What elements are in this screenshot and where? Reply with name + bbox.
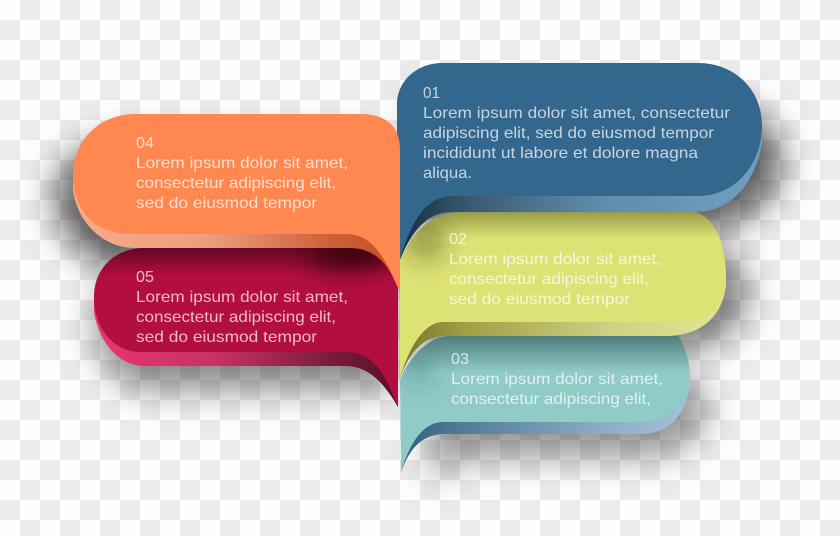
bubble 05 text: consectetur adipiscing elit,: [136, 309, 336, 326]
bubble 03 text: consectetur adipiscing elit,: [451, 391, 651, 408]
bubble 01 text: aliqua.: [423, 165, 472, 182]
bubble 01 text: Lorem ipsum dolor sit amet, consectetur: [423, 105, 731, 122]
bubble 02 yellow: [395, 212, 730, 378]
bubble 05 text: Lorem ipsum dolor sit amet,: [136, 289, 348, 306]
bubble 04 text: Lorem ipsum dolor sit amet,: [136, 155, 348, 172]
bubble 02 cast shadow: [395, 212, 730, 260]
bubble 02 text: sed do eiusmod tempor: [449, 291, 631, 308]
bubble 02 text: consectetur adipiscing elit,: [449, 271, 649, 288]
bubble 03 text: Lorem ipsum dolor sit amet,: [451, 371, 663, 388]
bubble 02 side: [400, 270, 726, 378]
bubble 05 text: [136, 269, 348, 346]
bubble 01 text: 01: [423, 85, 440, 102]
bubble 04 orange: [73, 114, 400, 292]
bubble 04 side: [73, 175, 400, 292]
bubble 01 blue: [397, 63, 762, 260]
bubble 01 text: incididunt ut labore et dolore magna: [423, 145, 698, 162]
bubble 05 text: 05: [136, 269, 154, 286]
bubble 03 face: [400, 336, 690, 473]
bubble 04 face: [73, 114, 400, 292]
bubble 04 text: [136, 135, 348, 212]
drop shadows: [55, 100, 782, 480]
bubble 04 text: sed do eiusmod tempor: [136, 195, 318, 212]
bubble 02 face: [400, 212, 726, 378]
bubble 03 text: [451, 351, 663, 408]
bubble 05 crimson: [90, 242, 400, 407]
bubble 04 text: consectetur adipiscing elit,: [136, 175, 336, 192]
bubble 02 text: 02: [449, 231, 467, 248]
bubble 02 text: Lorem ipsum dolor sit amet,: [449, 251, 661, 268]
bubble 05 text: sed do eiusmod tempor: [136, 329, 318, 346]
bubble 05 face: [94, 248, 398, 407]
bubble 05 side: [94, 297, 398, 407]
bubble 01 side: [400, 125, 762, 260]
bubble 01 text: adipiscing elit, sed do eiusmod tempor: [423, 125, 715, 142]
bubble 03 side: [401, 370, 690, 473]
bubble 01 text: [423, 85, 731, 182]
bubble 03 teal: [395, 336, 695, 473]
bubble 05 cast shadow: [90, 242, 400, 276]
bubble 02 text: [449, 231, 661, 308]
bubble 03 text: 03: [451, 351, 469, 368]
bubble 04 text: 04: [136, 135, 154, 152]
bubble 01 face: [397, 63, 762, 260]
bubble 03 cast shadow: [395, 336, 695, 384]
